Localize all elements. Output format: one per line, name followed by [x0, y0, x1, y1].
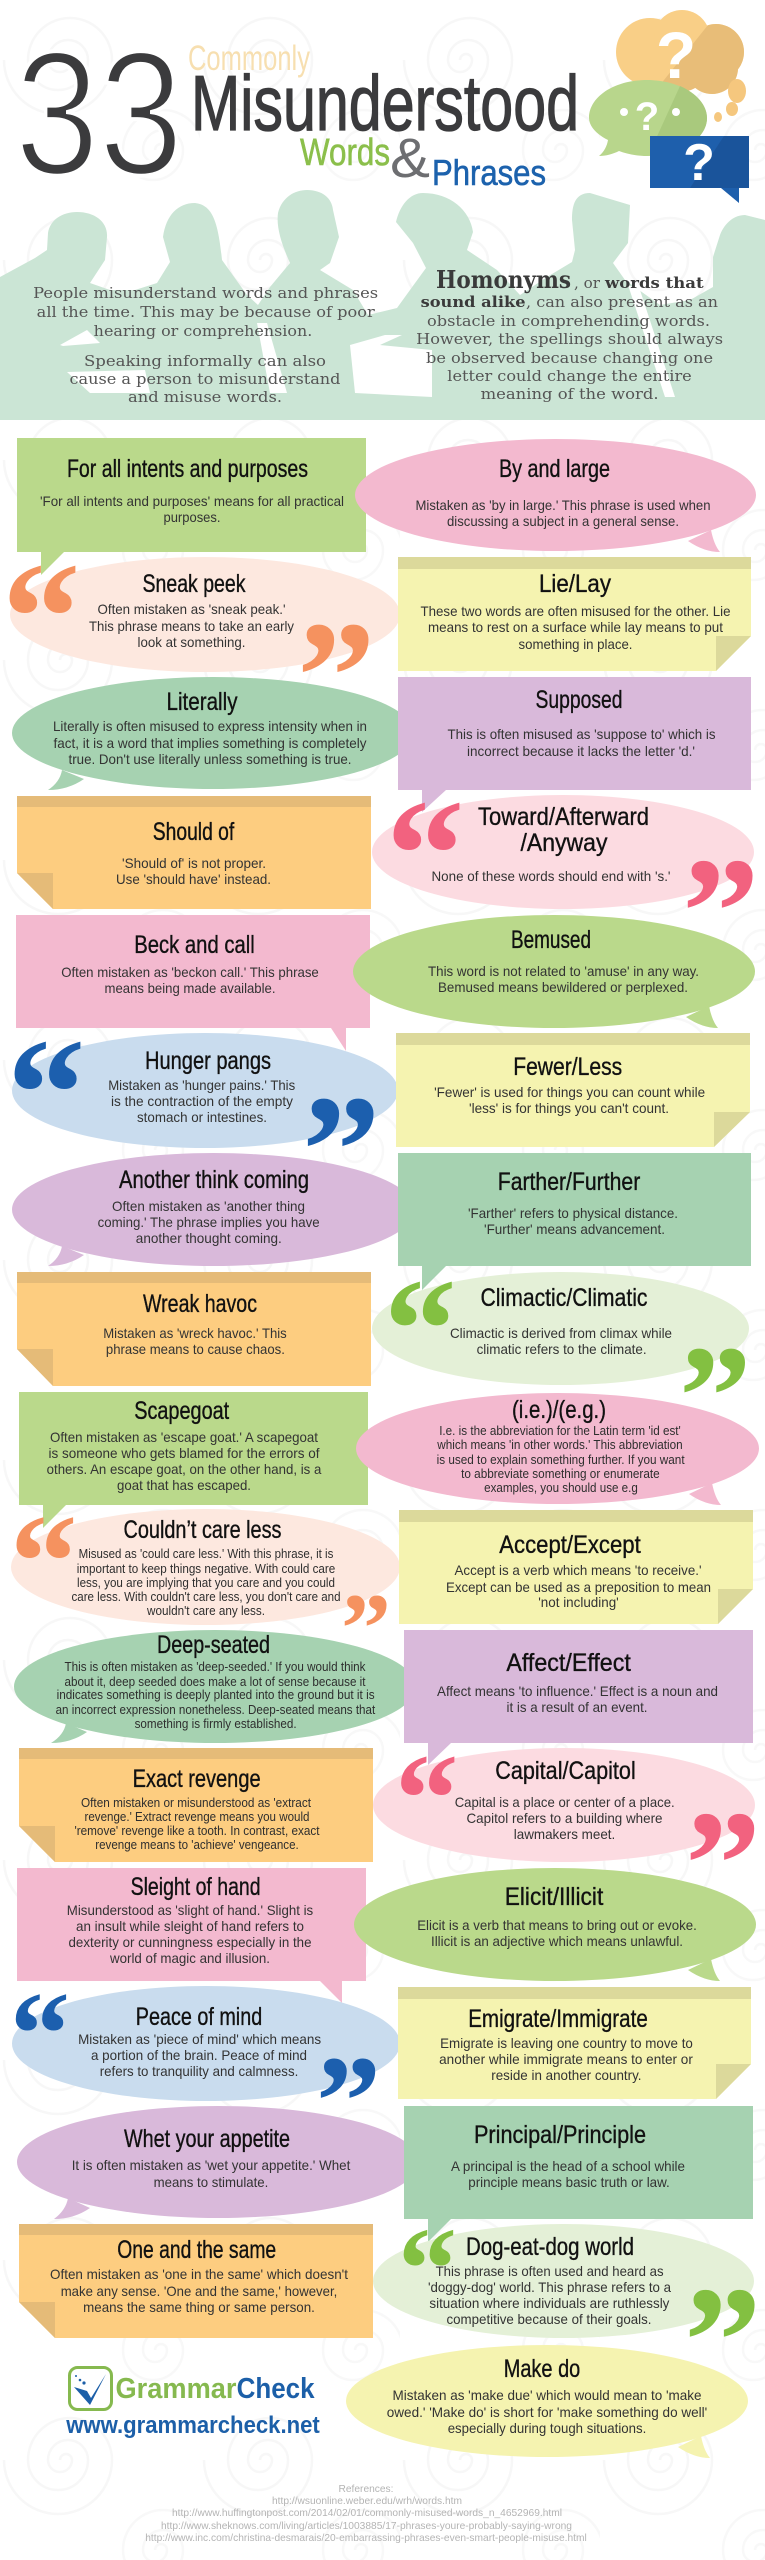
intro text: right: be observed because changing one: [426, 349, 713, 367]
card: Lie/Lay: These two words are often misused for the other. Lie: [420, 603, 731, 619]
website url: www.grammarcheck.net: [65, 2412, 320, 2439]
card: Climactic/Climatic: “: [384, 1250, 456, 1410]
card: Accept/Except: Except can be used as a preposition to mean: [446, 1579, 711, 1595]
card: Toward/Afterward/Anyway: /Anyway: [520, 829, 608, 857]
card: Peace of mind: a portion of the brain. Peace of mind: [91, 2047, 307, 2063]
card: For all intents and purposes: 'For all intents and purposes' means for all practical: [40, 493, 344, 509]
intro text: left: People misunderstand words and phrases: [33, 284, 378, 302]
card: One and the same: means the same thing or same person.: [83, 2299, 315, 2315]
card: Sleight of hand: Sleight of hand: [131, 1873, 261, 1901]
card: Couldn't care less: less, you are implying that you care and you could: [77, 1576, 335, 1590]
word: Misunderstood: Misunderstood: [191, 59, 579, 147]
card: Deep-seated: indicates something is deeply planted into the ground but it is: [57, 1688, 375, 1702]
card: Hunger pangs: is the contraction of the empty: [111, 1093, 293, 1109]
intro text: right: meaning of the word.: [481, 385, 659, 403]
card: Emigrate/Immigrate: [398, 1987, 751, 2099]
icon: thought cloud with question mark: [616, 10, 746, 122]
card: Fewer/Less: 'Fewer' is used for things you can count while: [434, 1084, 705, 1100]
word: Words: Words: [300, 132, 390, 174]
card: Deep-seated: [14, 1630, 416, 1743]
card: Exact revenge: [19, 1748, 373, 1862]
card: Farther/Further: Farther/Further: [498, 1168, 640, 1196]
card: Principal/Principle: [404, 2106, 753, 2242]
card: Deep-seated: an incorrect expression nonetheless. Deep-seated means that: [56, 1703, 376, 1717]
card: For all intents and purposes: [17, 438, 366, 575]
intro text: right: Homonyms: [436, 265, 571, 294]
card: Affect/Effect: Affect/Effect: [506, 1649, 631, 1677]
card: Climactic/Climatic: Climactic/Climatic: [480, 1284, 648, 1312]
card: Dog-eat-dog world: Dog-eat-dog world: [466, 2233, 634, 2261]
intro text: left: hearing or comprehension.: [94, 322, 312, 340]
card: Hunger pangs: Mistaken as 'hunger pains.' This: [108, 1077, 295, 1093]
card: Farther/Further: [398, 1153, 751, 1290]
card: Farther/Further: 'Farther' refers to physical distance.: [468, 1205, 678, 1221]
intro text: left: and misuse words.: [128, 388, 282, 406]
card: Accept/Except: [399, 1510, 753, 1624]
intro text: left: cause a person to misunderstand: [70, 370, 341, 388]
intro text: right: [416, 265, 723, 403]
card: Exact revenge: 'remove' revenge like a tooth. In contrast, exact: [74, 1824, 320, 1838]
icon: blue speech box with question mark: [650, 134, 749, 203]
card: Make do: especially during tough situations.: [448, 2420, 646, 2436]
card: For all intents and purposes: For all intents and purposes: [67, 455, 308, 483]
card: Peace of mind: “: [10, 1967, 70, 2100]
card: Make do: owed.' 'Make do' is short for 'make something do well': [387, 2404, 707, 2420]
card: Dog-eat-dog world: ”: [684, 2255, 762, 2427]
card: Capital/Capitol: [373, 1729, 761, 1948]
card: Scapegoat: goat that has escaped.: [117, 1477, 251, 1493]
card: Affect/Effect: [404, 1630, 753, 1765]
card: Another think coming: Another think coming: [119, 1166, 309, 1194]
card: Another think coming: Often mistaken as 'another thing: [112, 1198, 305, 1214]
card: Sneak peek: Sneak peek: [142, 570, 246, 598]
intro text: right: letter could change the entire: [447, 367, 692, 385]
icon: checkmark box: [70, 2368, 112, 2410]
card: Another think coming: [12, 1153, 415, 1266]
wordmark: [116, 2373, 315, 2405]
card: Emigrate/Immigrate: another while immigrate means to enter or: [439, 2051, 693, 2067]
card: Dog-eat-dog world: This phrase is often used and heard as: [436, 2263, 664, 2279]
intro text: right: obstacle in comprehending words.: [427, 312, 710, 330]
card: Wreak havoc: Mistaken as 'wreck havoc.' This: [103, 1325, 287, 1341]
card: Peace of mind: ”: [316, 2030, 381, 2174]
card: Toward/Afterward/Anyway: [372, 767, 760, 998]
card: Beck and call: Beck and call: [134, 931, 255, 959]
card: One and the same: make any sense. 'One and the same,' however,: [61, 2283, 337, 2299]
card: Whet your appetite: means to stimulate.: [154, 2174, 268, 2190]
card: Bemused: Bemused means bewildered or perplexed.: [438, 979, 688, 995]
card: Hunger pangs: [7, 1006, 398, 1237]
card: Lie/Lay: [398, 557, 751, 671]
card: Capital/Capitol: Capitol refers to a building where: [466, 1810, 663, 1826]
card: Capital/Capitol: ”: [685, 1780, 761, 1948]
card: (i.e.)/(e.g.): [356, 1393, 759, 1505]
icon: blue speech box with question mark: ?: [683, 134, 715, 192]
card: Exact revenge: Often mistaken or misunderstood as 'extract: [81, 1796, 311, 1810]
card: Supposed: This is often misused as 'suppose to' which is: [448, 726, 716, 742]
card: Climactic/Climatic: climatic refers to the climate.: [477, 1341, 647, 1357]
card: Deep-seated: about it, deep seeded does make a lot of sense because it: [64, 1675, 366, 1689]
card: Climactic/Climatic: [372, 1250, 752, 1477]
card: Couldn't care less: wouldn't care any less.: [146, 1604, 265, 1618]
card: By and large: By and large: [499, 455, 610, 483]
card: Scapegoat: others. An escape goat, on the other hand, is a: [47, 1461, 322, 1477]
card: Principal/Principle: A principal is the head of a school while: [451, 2158, 685, 2174]
card: For all intents and purposes: purposes.: [164, 509, 220, 525]
card: Fewer/Less: [396, 1033, 750, 1147]
card: Exact revenge: revenge means to 'achieve' vengeance.: [95, 1838, 299, 1852]
card: Couldn't care less: “: [10, 1488, 78, 1637]
card: Elicit/Illicit: Elicit/Illicit: [505, 1883, 603, 1911]
icon: green speech bubble with question mark: [589, 80, 707, 156]
card: (i.e.)/(e.g.): which means 'in other words.' This abbreviation: [436, 1438, 683, 1452]
references: References:: [338, 2483, 394, 2495]
card: One and the same: One and the same: [117, 2236, 276, 2264]
card: One and the same: [19, 2224, 373, 2338]
card: Couldn't care less: care less. With couldn't care less, you don't care and: [72, 1590, 341, 1604]
card: Wreak havoc: phrase means to cause chaos.: [106, 1341, 285, 1357]
card: Accept/Except: 'not including': [538, 1594, 619, 1610]
card: Deep-seated: This is often mistaken as 'deep-seeded.' If you would think: [64, 1660, 366, 1674]
card: Make do: [346, 2345, 748, 2458]
card: Sleight of hand: [17, 1868, 366, 2003]
word: Phrases: Phrases: [432, 152, 546, 193]
card: Hunger pangs: ”: [302, 1063, 380, 1237]
card: Principal/Principle: principle means basic truth or law.: [468, 2174, 670, 2190]
card: Bemused: This word is not related to 'amuse' in any way.: [428, 963, 699, 979]
card: Emigrate/Immigrate: Emigrate/Immigrate: [468, 2005, 648, 2033]
wordmark: Check: [237, 2373, 315, 2405]
card: Should of: [17, 796, 371, 909]
card: Literally: fact, it is a word that implies something is completely: [54, 735, 366, 751]
intro text: right: , can also present as an: [526, 293, 718, 311]
card: Climactic/Climatic: Climactic is derived from climax while: [450, 1325, 672, 1341]
card: Fewer/Less: Fewer/Less: [513, 1053, 622, 1081]
header: title: [15, 16, 579, 212]
card: Dog-eat-dog world: “: [398, 2203, 457, 2334]
icon: thought cloud with question mark: ?: [656, 18, 696, 92]
references: http://wsuonline.weber.edu/wrh/words.htm: [272, 2495, 462, 2507]
card: Sleight of hand: dexterity or cunningness especially in the: [68, 1934, 312, 1950]
card: Sleight of hand: world of magic and illusion.: [109, 1950, 270, 1966]
card: Bemused: [353, 915, 755, 1028]
card: Lie/Lay: Lie/Lay: [539, 570, 611, 598]
card: Principal/Principle: Principal/Principle: [474, 2121, 646, 2149]
card: Peace of mind: refers to tranquility and calmness.: [100, 2063, 298, 2079]
card: Scapegoat: Often mistaken as 'escape goat.' A scapegoat: [50, 1429, 318, 1445]
card: Dog-eat-dog world: competitive because of their goals.: [446, 2311, 652, 2327]
ampersand: &: [390, 126, 430, 189]
card: By and large: [355, 439, 756, 552]
card: Beck and call: [16, 915, 370, 1051]
card: Sleight of hand: Misunderstood as 'slight of hand.' Slight is: [67, 1902, 313, 1918]
card: Scapegoat: is someone who gets blamed for the errors of: [48, 1445, 320, 1461]
card: Lie/Lay: means to rest on a surface while lay means to put: [428, 619, 723, 635]
card: Dog-eat-dog world: [373, 2203, 762, 2427]
intro text: right: , or: [574, 274, 601, 292]
references: http://www.inc.com/christina-desmarais/20-embarrassing-phrases-even-smart-people-misuse.html: [145, 2532, 587, 2544]
card: Should of: Should of: [153, 818, 234, 846]
card: Dog-eat-dog world: situation where individuals are ruthlessly: [429, 2295, 669, 2311]
card: Beck and call: Often mistaken as 'beckon call.' This phrase: [61, 964, 319, 980]
card: Dog-eat-dog world: 'doggy-dog' world. This phrase refers to a: [428, 2279, 671, 2295]
intro text: left: [33, 284, 378, 406]
card: Literally: Literally: [166, 688, 238, 716]
card: Accept/Except: Accept is a verb which means 'to receive.': [454, 1562, 702, 1578]
card: (i.e.)/(e.g.): to abbreviate something or enumerate: [461, 1467, 660, 1481]
card: Deep-seated: Deep-seated: [157, 1631, 270, 1659]
icon: green speech bubble with question mark: ?: [635, 95, 659, 139]
big number 33: 33: [15, 16, 183, 212]
card: Sneak peek: [2, 530, 400, 763]
card: Couldn't care less: Couldn’t care less: [124, 1516, 282, 1544]
silhouettes of people talking: [0, 190, 765, 420]
card: Scapegoat: Scapegoat: [134, 1397, 229, 1425]
card: Literally: Literally is often misused to express intensity when in: [53, 718, 367, 734]
card: Hunger pangs: “: [7, 1006, 86, 1180]
card: Elicit/Illicit: [354, 1868, 756, 1981]
card: Hunger pangs: stomach or intestines.: [137, 1109, 267, 1125]
logo: GrammarCheck: [65, 2368, 320, 2439]
card: Accept/Except: Accept/Except: [499, 1531, 641, 1559]
intro text: right: words that: [604, 274, 704, 292]
card: By and large: Mistaken as 'by in large.' This phrase is used when: [416, 497, 710, 513]
card: Make do: Mistaken as 'make due' which would mean to 'make: [392, 2387, 702, 2403]
card: Beck and call: means being made available.: [104, 980, 276, 996]
card: Bemused: Bemused: [511, 926, 591, 954]
card: Whet your appetite: Whet your appetite: [124, 2125, 290, 2153]
card: Elicit/Illicit: Illicit is an adjective which means unlawful.: [431, 1933, 683, 1949]
card: Peace of mind: [10, 1967, 400, 2174]
card: Sneak peek: This phrase means to take an early: [89, 618, 294, 634]
card: Couldn't care less: [10, 1488, 400, 1684]
card: Whet your appetite: [17, 2106, 419, 2219]
card: Another think coming: another thought coming.: [136, 1230, 282, 1246]
references: http://www.huffingtonpost.com/2014/02/01/commonly-misused-words_n_4652969.html: [172, 2507, 562, 2519]
card: Sleight of hand: an insult while sleight of hand refers to: [76, 1918, 304, 1934]
card: Emigrate/Immigrate: reside in another country.: [491, 2067, 642, 2083]
card: Wreak havoc: [17, 1272, 371, 1386]
wordmark: Grammar: [116, 2373, 236, 2405]
card: Supposed: Supposed: [536, 686, 622, 714]
card: Hunger pangs: Hunger pangs: [145, 1047, 271, 1075]
card: Couldn't care less: important to keep things negative. With could care: [77, 1562, 335, 1576]
card: Farther/Further: 'Further' means advancement.: [484, 1221, 665, 1237]
card: Wreak havoc: Wreak havoc: [143, 1290, 257, 1318]
card: Supposed: incorrect because it lacks the letter 'd.': [467, 743, 695, 759]
intro text: left: Speaking informally can also: [84, 352, 326, 370]
card: (i.e.)/(e.g.): (i.e.)/(e.g.): [512, 1396, 606, 1424]
intro text: right: However, the spellings should always: [416, 330, 723, 348]
card: (i.e.)/(e.g.): I.e. is the abbreviation for the Latin term 'id est': [439, 1424, 681, 1438]
card: Make do: Make do: [504, 2355, 580, 2383]
card: Another think coming: coming.' The phrase implies you have: [98, 1214, 320, 1230]
intro text: right: sound alike: [421, 293, 526, 311]
card: Should of: Use 'should have' instead.: [116, 871, 271, 887]
card: Emigrate/Immigrate: Emigrate is leaving one country to move to: [440, 2035, 693, 2051]
intro text: left: all the time. This may be because of poor: [37, 303, 376, 321]
card: Couldn't care less: ”: [341, 1573, 391, 1684]
card: Exact revenge: revenge.' Extract revenge means you would: [84, 1810, 310, 1824]
card: Lie/Lay: something in place.: [518, 636, 632, 652]
card: Sneak peek: Often mistaken as 'sneak peak.': [98, 601, 286, 617]
card: Fewer/Less: 'less' is for things you can't count.: [469, 1100, 669, 1116]
card: Peace of mind: Mistaken as 'piece of mind' which means: [78, 2031, 321, 2047]
card: Capital/Capitol: “: [395, 1729, 458, 1869]
card: (i.e.)/(e.g.): is used to explain something further. If you want: [437, 1453, 685, 1467]
card: Sneak peek: look at something.: [138, 634, 246, 650]
card: By and large: discussing a subject in a general sense.: [447, 513, 679, 529]
card: Affect/Effect: it is a result of an event.: [506, 1699, 648, 1715]
card: Elicit/Illicit: Elicit is a verb that means to bring out or evoke.: [417, 1917, 697, 1933]
card: Supposed: [398, 677, 751, 812]
card: Sneak peek: “: [2, 530, 80, 704]
card: Toward/Afterward/Anyway: “: [386, 767, 464, 941]
card: Exact revenge: Exact revenge: [133, 1765, 261, 1793]
card: Couldn't care less: Misused as 'could care less.' With this phrase, it is: [79, 1547, 333, 1561]
card: Scapegoat: [19, 1392, 368, 1528]
references: http://www.sheknows.com/living/articles/1003885/17-phrases-youre-probably-saying-wrong: [161, 2520, 572, 2532]
card: Toward/Afterward/Anyway: ”: [682, 826, 760, 998]
card: Climactic/Climatic: ”: [679, 1317, 752, 1477]
card: Peace of mind: Peace of mind: [136, 2003, 262, 2031]
card: Sneak peek: ”: [297, 589, 376, 763]
card: Capital/Capitol: Capital/Capitol: [495, 1757, 636, 1785]
card: Capital/Capitol: Capital is a place or center of a place.: [455, 1794, 675, 1810]
card: Toward/Afterward/Anyway: None of these words should end with 's.': [432, 868, 670, 884]
card: Toward/Afterward/Anyway: Toward/Afterward: [478, 803, 649, 831]
card: Whet your appetite: It is often mistaken as 'wet your appetite.' Whet: [72, 2157, 350, 2173]
card: Affect/Effect: Affect means 'to influence.' Effect is a noun and: [437, 1683, 718, 1699]
references: [145, 2483, 587, 2544]
card: Literally: [12, 677, 414, 790]
word: Commonly: Commonly: [188, 39, 310, 78]
card: Capital/Capitol: lawmakers meet.: [514, 1826, 615, 1842]
card: (i.e.)/(e.g.): examples, you should use e.g: [484, 1481, 638, 1495]
card: Deep-seated: something is firmly established.: [135, 1717, 297, 1731]
card: Should of: 'Should of' is not proper.: [122, 855, 266, 871]
card: Literally: true. Don't use literally unless something is true.: [68, 751, 352, 767]
card: One and the same: Often mistaken as 'one in the same' which doesn't: [50, 2266, 348, 2282]
